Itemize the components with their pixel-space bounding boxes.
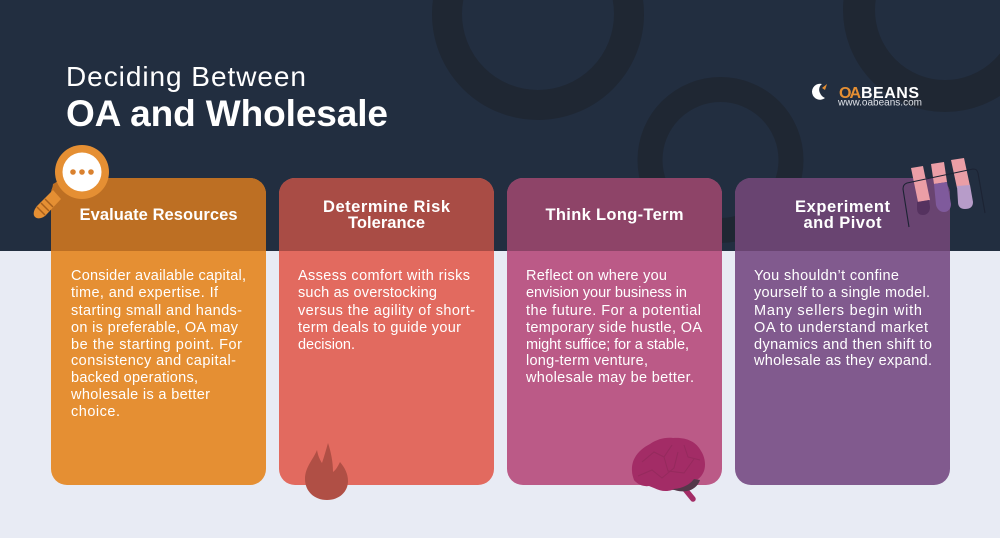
text block: Think Long-Term	[525, 268, 702, 386]
text block: Evaluate Resources: wholesale is a better	[70, 387, 210, 403]
text block: Evaluate Resources: starting small and hands-	[71, 303, 242, 319]
panel: Evaluate Resources	[51, 178, 266, 485]
text block: Think Long-Term: Reflect on where you	[526, 268, 667, 284]
text block: Think Long-Term: envision your business in	[526, 285, 687, 301]
text block: Think Long-Term: wholesale may be better.	[525, 370, 694, 386]
text block: Evaluate Resources: choice.	[71, 404, 120, 420]
text block: Determine Risk Tolerance	[298, 268, 475, 353]
icon: test tubes	[903, 158, 985, 227]
heading: Evaluate Resources: Evaluate Resources	[80, 206, 238, 224]
text block: Determine Risk Tolerance: term deals to guide your	[298, 320, 461, 336]
logo: OABEANS: www.oabeans.com	[837, 98, 922, 108]
heading: Think Long-Term: Think Long-Term	[546, 206, 684, 224]
text block: Determine Risk Tolerance: decision.	[298, 337, 355, 353]
logo: OABEANS: BEANS	[861, 85, 919, 102]
text block: Determine Risk Tolerance: versus the agility of short-	[298, 303, 475, 319]
panel: Think Long-Term	[507, 178, 722, 485]
text block: Experiment and Pivot: yourself to a single model.	[754, 285, 930, 301]
text block: Think Long-Term: might suffice; for a stable,	[526, 337, 689, 353]
text block: Evaluate Resources: Consider available capital,	[71, 268, 246, 284]
text block: Evaluate Resources: on is preferable, OA may	[71, 320, 239, 336]
text block: Think Long-Term: the future. For a potential	[526, 303, 701, 319]
heading: Experiment and Pivot: Experiment	[795, 198, 890, 216]
heading: Determine Risk Tolerance: Determine Risk	[323, 198, 451, 216]
text block: Evaluate Resources: be the starting point. For	[71, 337, 242, 353]
title: Deciding Between	[66, 61, 306, 92]
heading: Determine Risk Tolerance: Tolerance	[348, 214, 425, 232]
text block: Think Long-Term: temporary side hustle, OA	[526, 320, 702, 336]
text block: Experiment and Pivot: Many sellers begin with	[754, 303, 922, 319]
panel: Experiment and Pivot	[735, 178, 950, 485]
heading: Determine Risk Tolerance	[323, 198, 451, 232]
text block: Experiment and Pivot	[753, 268, 932, 369]
logo: OABEANS: OA	[839, 85, 861, 102]
text block: Experiment and Pivot: wholesale as they expand.	[753, 353, 932, 369]
heading: Experiment and Pivot	[795, 198, 890, 232]
heading: Experiment and Pivot: and Pivot	[804, 214, 882, 232]
icon: magnifying glass	[34, 145, 109, 218]
text block: Experiment and Pivot: dynamics and then shift to	[754, 337, 932, 353]
text block: Experiment and Pivot: You shouldn’t confine	[754, 268, 899, 284]
text block: Determine Risk Tolerance: such as overstocking	[298, 285, 437, 301]
logo: OABEANS	[812, 84, 922, 108]
icon: flame	[305, 443, 348, 500]
text block: Experiment and Pivot: OA to understand market	[754, 320, 928, 336]
text block: Evaluate Resources: consistency and capital-	[71, 353, 236, 369]
icon: brain	[632, 438, 705, 499]
panel: Determine Risk Tolerance	[279, 178, 494, 485]
text block: Determine Risk Tolerance: Assess comfort with risks	[298, 268, 470, 284]
text block: Think Long-Term: long-term venture,	[526, 353, 648, 369]
title	[66, 61, 388, 134]
title: OA and Wholesale	[66, 93, 388, 134]
text block: Evaluate Resources	[70, 268, 246, 420]
text block: Evaluate Resources: backed operations,	[71, 370, 198, 386]
text block: Evaluate Resources: time, and expertise. If	[71, 285, 219, 301]
